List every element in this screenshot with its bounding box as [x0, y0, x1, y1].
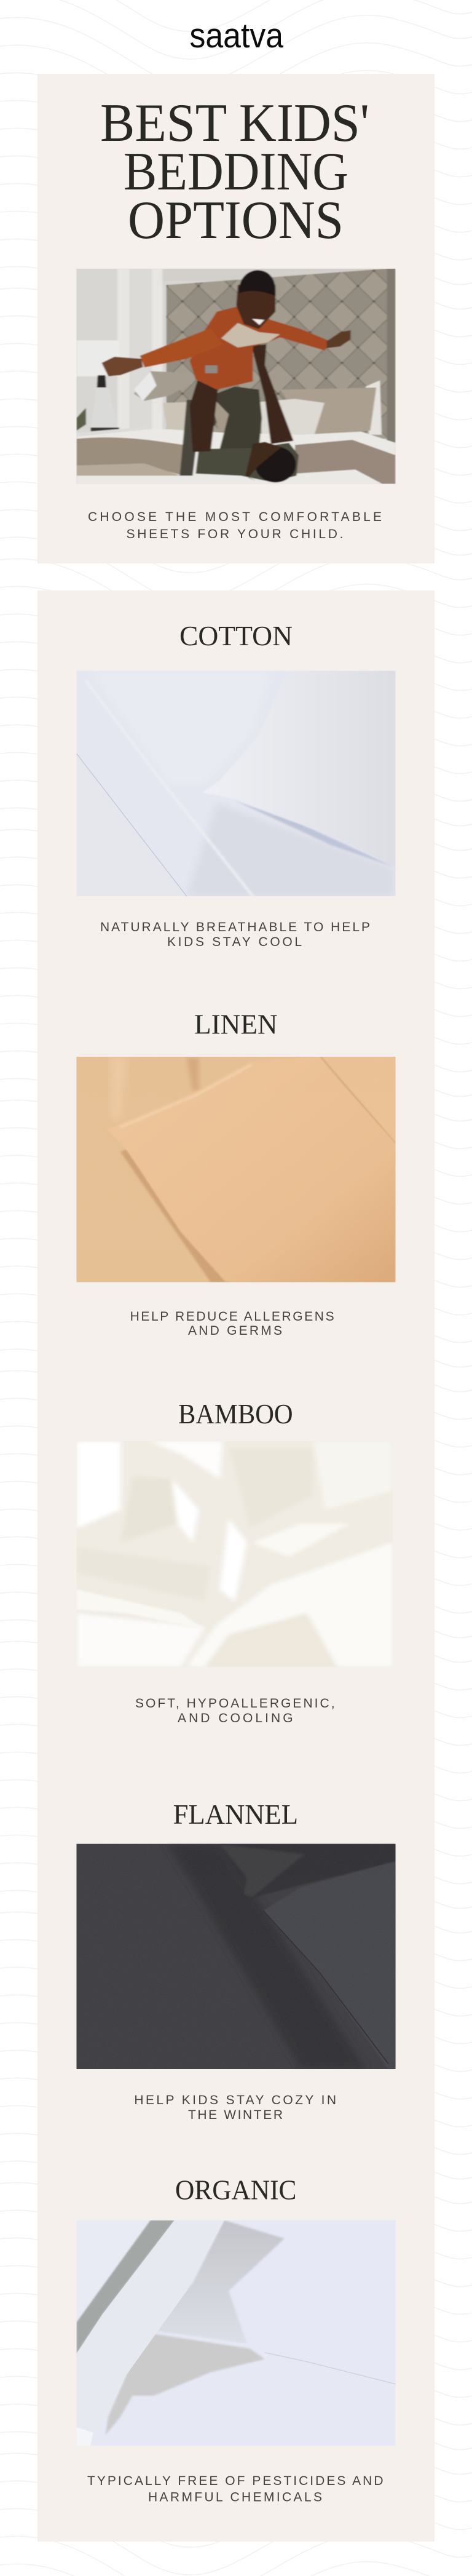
title: BEST KIDS' [100, 93, 369, 153]
heading: organic: ORGANIC [175, 2174, 296, 2205]
photo: white cotton sheets [76, 670, 396, 896]
caption: cotton: NATURALLY BREATHABLE TO HELP [100, 920, 370, 934]
caption: linen: HELP REDUCE ALLERGENS [130, 1310, 334, 1324]
caption: flannel: HELP KIDS STAY COZY IN [134, 2093, 336, 2107]
option: organic [76, 2174, 396, 2505]
logo: saatva: saatva [189, 16, 283, 55]
caption: cotton [100, 920, 370, 949]
caption: linen [130, 1310, 334, 1338]
caption: organic [87, 2474, 384, 2505]
title [100, 93, 369, 250]
caption: flannel: THE WINTER [188, 2108, 283, 2122]
photo: peach linen pillow [76, 1057, 396, 1282]
panel: bedding options [37, 590, 435, 2542]
heading: bamboo: BAMBOO [178, 1398, 293, 1429]
title: BEDDING [124, 142, 348, 202]
caption: linen: AND GERMS [188, 1324, 282, 1338]
option: flannel [76, 1799, 396, 2122]
caption: bamboo: AND COOLING [178, 1711, 293, 1725]
caption: cotton: KIDS STAY COOL [167, 935, 302, 949]
title: OPTIONS [128, 191, 344, 250]
heading: flannel: FLANNEL [173, 1799, 298, 1830]
caption: flannel [134, 2093, 336, 2122]
intro caption: SHEETS FOR YOUR CHILD. [127, 527, 343, 541]
caption: organic: HARMFUL CHEMICALS [148, 2490, 322, 2505]
heading: linen: LINEN [194, 1009, 278, 1040]
photo: father lifting child on bed [76, 268, 396, 484]
option: linen [76, 1009, 396, 1338]
caption: bamboo: SOFT, HYPOALLERGENIC, [135, 1696, 335, 1711]
intro caption: CHOOSE THE MOST COMFORTABLE [88, 510, 382, 524]
photo: charcoal flannel sheets [76, 1844, 396, 2069]
photo: white bamboo sheets [76, 1441, 392, 1667]
heading: cotton: COTTON [179, 620, 293, 651]
option: bamboo [76, 1398, 393, 1725]
intro caption [88, 510, 382, 541]
panel: intro [37, 74, 435, 563]
option: cotton [76, 620, 396, 949]
photo: white organic sheets [76, 2220, 396, 2446]
caption: bamboo [135, 1696, 335, 1725]
caption: organic: TYPICALLY FREE OF PESTICIDES AND [87, 2474, 384, 2488]
